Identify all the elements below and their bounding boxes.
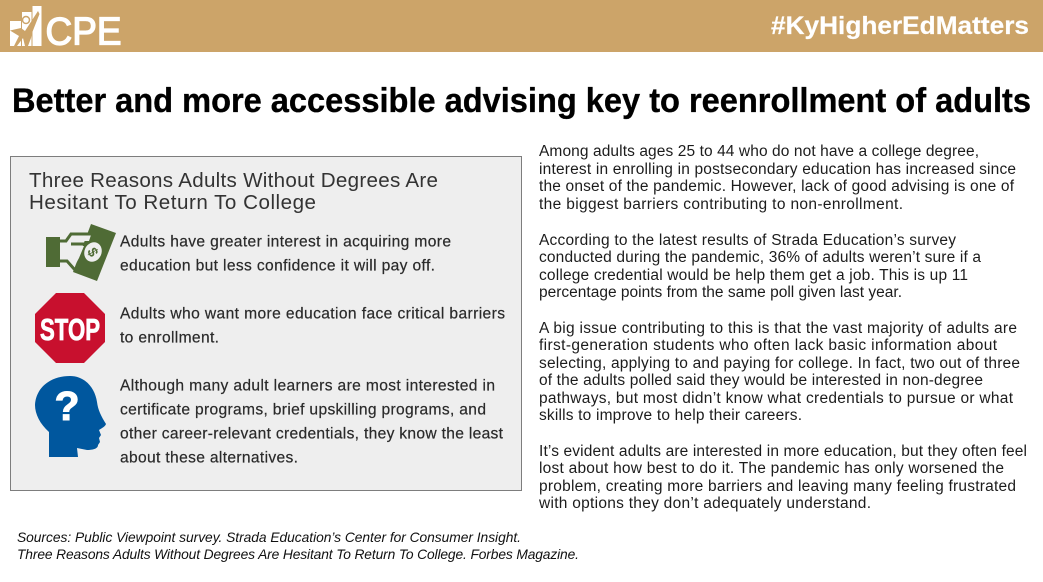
panel heading: Three Reasons Adults Without Degrees Are	[29, 169, 438, 192]
paragraph 4	[538, 443, 1027, 512]
paragraph 3: A big issue contributing to this is that the vast majority of adults are	[539, 320, 1017, 337]
panel: three reasons	[10, 156, 522, 490]
sources: Three Reasons Adults Without Degrees Are Hesitant To Return To College. Forbes Magazine.	[17, 547, 579, 562]
reason 2 text: Adults who want more education face critical barriers	[120, 306, 505, 322]
paragraph 3	[539, 320, 1020, 424]
panel heading	[29, 169, 438, 214]
paragraph 3: selecting, applying to and paying for college. In fact, two out of three	[539, 355, 1020, 372]
paragraph 2: college credential would be help them get a job. This is up 11	[539, 267, 968, 284]
reason 3 text: other career-relevant credentials, they know the least	[120, 426, 504, 442]
reason 3 text	[120, 378, 504, 466]
reason 3 text: certificate programs, brief upskilling programs, and	[120, 402, 486, 418]
header banner	[0, 0, 1043, 54]
icon: head with question mark	[35, 376, 106, 457]
reason 2 text	[120, 306, 505, 346]
reason 1 text: Adults have greater interest in acquiring more	[120, 234, 451, 250]
CPE logo: CPE	[46, 10, 122, 54]
paragraph 2: conducted during the pandemic, 36% of adults weren’t sure if a	[539, 249, 981, 266]
icon: stop sign: STOP	[40, 312, 100, 347]
paragraph 4: with options they don’t adequately understand.	[538, 495, 871, 512]
icon: hand with money	[46, 224, 116, 281]
paragraph 2: percentage points from the same poll given last year.	[539, 284, 902, 301]
icon: stop sign	[35, 293, 105, 363]
panel heading: Hesitant To Return To College	[29, 191, 316, 214]
paragraph 3: skills to improve to help their careers.	[539, 407, 802, 424]
hashtag: #KyHigherEdMatters	[771, 12, 1029, 40]
paragraph 3: of the adults polled said they would be interested in non-degree	[539, 372, 983, 389]
reason 1 text	[120, 234, 451, 274]
paragraph 1	[539, 143, 1016, 213]
paragraph 4: It’s evident adults are interested in more education, but they often feel	[539, 443, 1027, 460]
paragraph 3: pathways, but most didn’t know what credentials to pursue or what	[539, 390, 1014, 407]
paragraph 3: first-generation students who often lack basic information about	[539, 337, 998, 354]
icon: hand with money: $	[84, 245, 102, 260]
sources: Sources: Public Viewpoint survey. Strada Education’s Center for Consumer Insight.	[17, 530, 521, 545]
paragraph 1: the onset of the pandemic. However, lack of good advising is one of	[539, 178, 1015, 195]
reason 2 text: to enrollment.	[120, 330, 219, 346]
paragraph 2: According to the latest results of Strada Education’s survey	[539, 232, 956, 249]
paragraph 1: interest in enrolling in postsecondary education has increased since	[539, 161, 1016, 178]
paragraph 4: problem, creating more barriers and leaving many feeling frustrated	[539, 478, 1016, 495]
CPE logo	[10, 6, 122, 54]
icon: head with question mark: ?	[54, 383, 80, 429]
paragraph 4: lost about how best to do it. The pandemic has only worsened the	[539, 460, 1004, 477]
reason 3 text: about these alternatives.	[120, 450, 298, 466]
paragraph 2	[539, 232, 981, 301]
paragraph 1: the biggest barriers contributing to non-enrollment.	[539, 196, 903, 213]
paragraph 1: Among adults ages 25 to 44 who do not have a college degree,	[539, 143, 979, 160]
sources	[17, 530, 579, 562]
reason 3 text: Although many adult learners are most interested in	[120, 378, 495, 394]
reason 1 text: education but less confidence it will pay off.	[120, 258, 435, 274]
